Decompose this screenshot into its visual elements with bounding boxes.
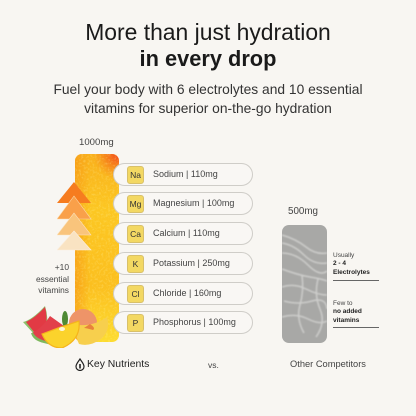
- pill: phosphorus: P: [133, 318, 138, 328]
- label: +10 essential vitamins: [36, 262, 69, 295]
- callout: electrolytes: Usually: [333, 252, 354, 259]
- label: 500mg: 500mg: [288, 206, 318, 217]
- arrows: stacked chevrons: [57, 182, 92, 250]
- subtitle: Fuel your body with 6 electrolytes and 10 essential: [53, 82, 363, 97]
- label: +10 essential vitamins: vitamins: [38, 285, 69, 295]
- label: vs: vs.: [208, 360, 219, 370]
- pill: chloride: Cl: [131, 289, 140, 299]
- title: in every drop: [140, 46, 276, 71]
- brand: key nutrients: [75, 358, 149, 371]
- pill: phosphorus: Phosphorus | 100mg: [153, 317, 236, 327]
- callout: vitamins: no added: [333, 308, 362, 315]
- pill: magnesium: [113, 192, 253, 215]
- bar: other competitors: [282, 225, 327, 343]
- label: Key Nutrients: [87, 359, 149, 370]
- callout: vitamins: [333, 300, 379, 328]
- subtitle: [53, 82, 363, 116]
- callout: vitamins: Few to: [333, 300, 353, 307]
- callout: electrolytes: 2 - 4: [333, 260, 346, 267]
- pill: potassium: Potassium | 250mg: [153, 258, 230, 268]
- pill: calcium: [113, 222, 253, 245]
- pill: sodium: Na: [130, 170, 141, 180]
- pill: chloride: Chloride | 160mg: [153, 288, 221, 298]
- pill: magnesium: Magnesium | 100mg: [153, 198, 234, 208]
- pill: potassium: [113, 252, 253, 275]
- pill: sodium: [113, 163, 253, 186]
- label: +10 essential vitamins: essential: [36, 274, 69, 284]
- label: other competitors: Other Competitors: [290, 359, 366, 369]
- icon: fruit group: [23, 306, 108, 348]
- label: +10 essential vitamins: +10: [55, 262, 69, 272]
- pill: chloride: [113, 282, 253, 305]
- pill: sodium: Sodium | 110mg: [153, 169, 218, 179]
- callout: vitamins: vitamins: [333, 317, 359, 324]
- icon: drop: [75, 358, 85, 371]
- pill: potassium: K: [133, 259, 138, 269]
- bar: key nutrients: [75, 154, 119, 342]
- subtitle: vitamins for superior on-the-go hydration: [84, 101, 332, 116]
- pill: calcium: Ca: [130, 229, 141, 239]
- pill: phosphorus: [113, 311, 253, 334]
- title: More than just hydration: [85, 19, 331, 45]
- pill: calcium: Calcium | 110mg: [153, 228, 220, 238]
- title: [85, 19, 331, 71]
- label: 1000mg: 1000mg: [79, 137, 114, 148]
- callout: electrolytes: Electrolytes: [333, 269, 370, 276]
- callout: electrolytes: [333, 252, 379, 281]
- pill: magnesium: Mg: [130, 199, 141, 209]
